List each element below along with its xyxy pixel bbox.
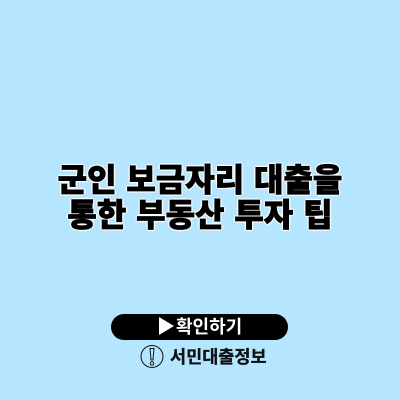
title: 통한 부동산 투자 팁: [67, 197, 333, 233]
brand: source logo: [140, 345, 267, 368]
title: [56, 162, 344, 233]
icon: exclamation circle: [140, 345, 164, 368]
brand name: 서민대출정보: [170, 347, 267, 367]
button label: 확인하기: [176, 317, 242, 337]
title: 군인 보금자리 대출을: [58, 162, 342, 198]
icon: play triangle: [159, 317, 174, 335]
button: confirm: [111, 314, 288, 340]
